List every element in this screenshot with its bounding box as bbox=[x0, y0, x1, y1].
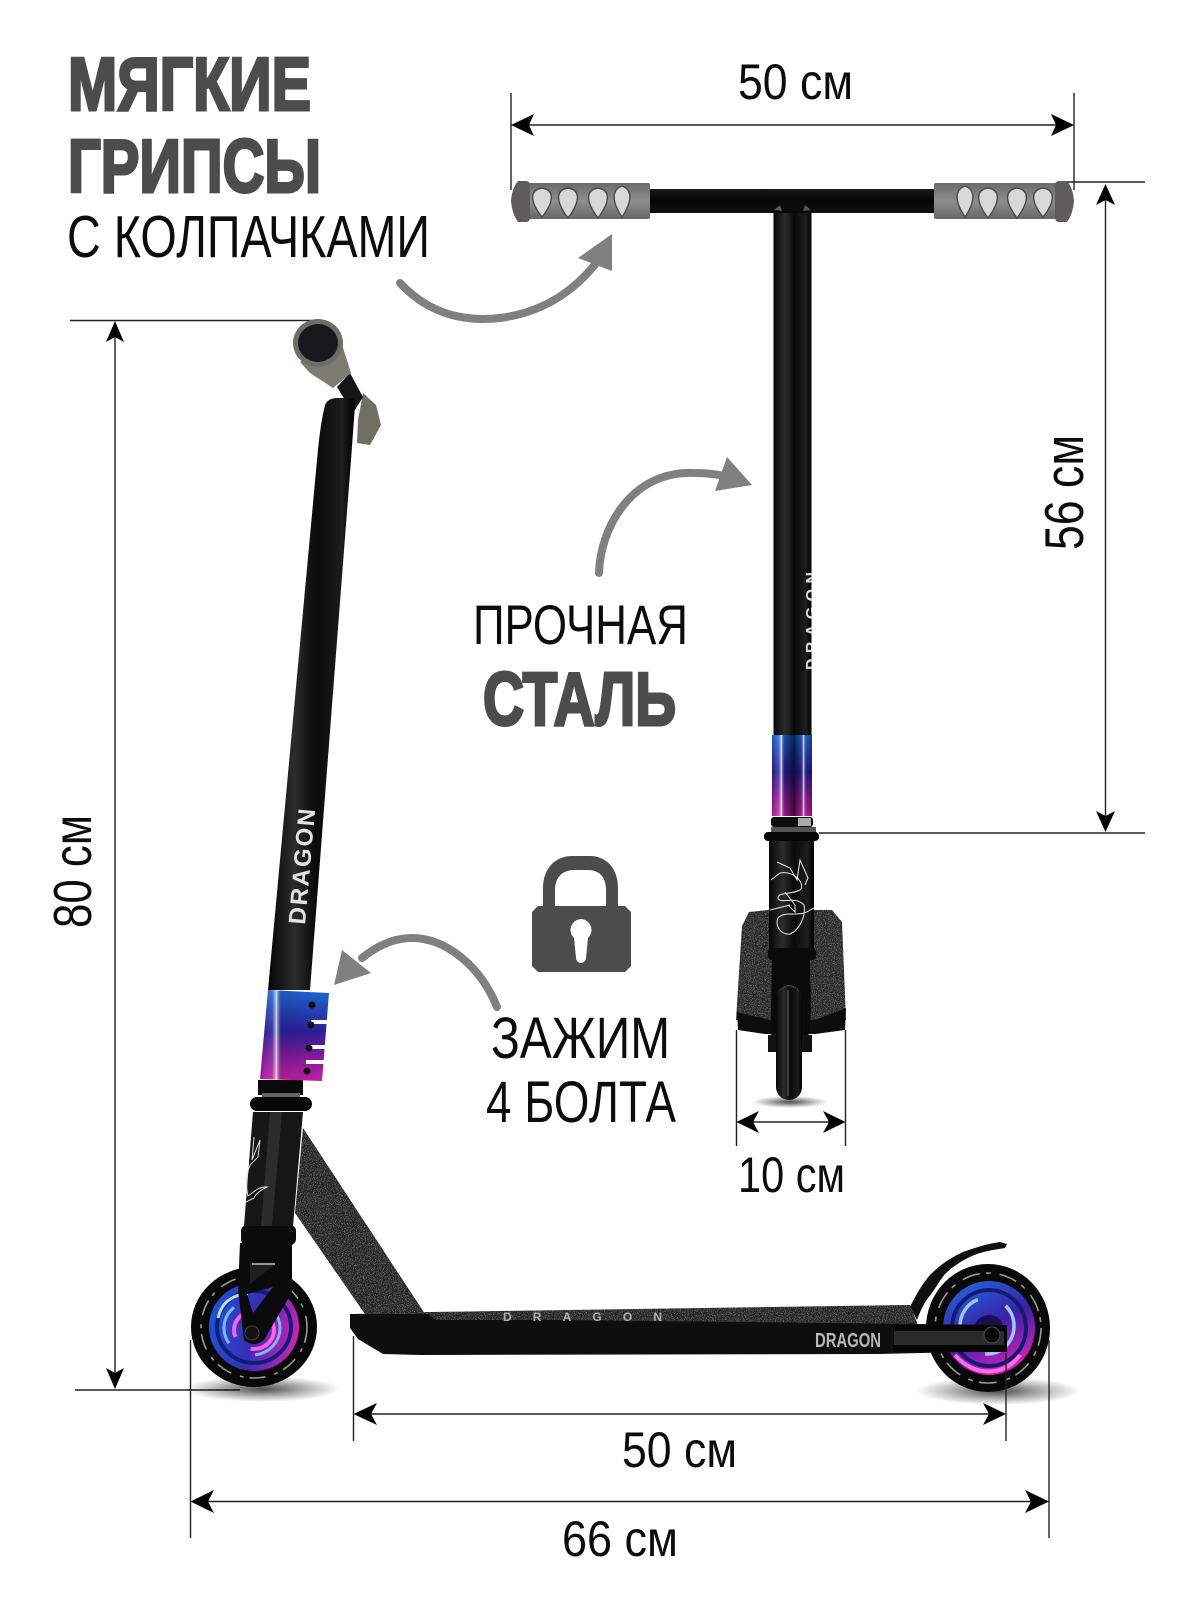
dimension: handlebar width 50 cm: 50 см bbox=[738, 54, 853, 110]
dimension: bar height 56 cm: 56 см bbox=[1033, 435, 1095, 550]
label: clamp with 4 bolts bbox=[486, 1006, 676, 1135]
fork side bbox=[238, 1243, 292, 1344]
front wheel side bbox=[191, 1267, 317, 1387]
front wheel bbox=[776, 987, 802, 1100]
right grip bbox=[934, 181, 1074, 222]
fork bbox=[771, 958, 811, 1040]
dimension: total height 80 cm bbox=[43, 320, 323, 1390]
bar handle side grips bbox=[293, 319, 381, 445]
title: soft grips with caps bbox=[67, 42, 430, 270]
dimension: total length 66 cm bbox=[190, 1340, 1049, 1567]
label line 1: ЗАЖИМ bbox=[491, 1006, 670, 1071]
arrow: to grips bbox=[400, 234, 612, 319]
clamp bbox=[260, 990, 329, 1081]
deck bbox=[350, 1305, 1007, 1355]
ground shadows bbox=[184, 1376, 1080, 1405]
T junction bbox=[773, 200, 812, 213]
icon: padlock bbox=[532, 856, 631, 972]
dimension: handlebar width 50 cm bbox=[511, 54, 1074, 190]
ground shadow bbox=[752, 1096, 828, 1108]
side view scooter bbox=[184, 319, 1080, 1405]
stem brand text: DRAGON bbox=[804, 572, 821, 670]
axle bolts bbox=[768, 1035, 812, 1052]
bar brand text: DRAGON bbox=[284, 808, 321, 926]
title line 1: МЯГКИЕ bbox=[68, 42, 311, 126]
front view scooter bbox=[511, 181, 1074, 1108]
dragon logo side bbox=[246, 1137, 267, 1202]
deck side brand text: DRAGON bbox=[815, 1330, 881, 1352]
dimension: bar height 56 cm bbox=[819, 182, 1145, 833]
lower headset side bbox=[241, 1225, 296, 1245]
dimension: total length 66 cm: 66 см bbox=[562, 1511, 678, 1567]
dimension: deck width 10 cm: 10 см bbox=[738, 1147, 845, 1203]
arrow: to steel bar bbox=[599, 457, 752, 573]
dragon logo bbox=[770, 860, 814, 934]
dimension: total height 80 cm: 80 см bbox=[43, 815, 103, 928]
crossbar bbox=[650, 189, 934, 213]
dimension: deck length 50 cm: 50 см bbox=[622, 1422, 737, 1478]
dimension: deck width 10 cm bbox=[736, 1030, 846, 1203]
upper headset side bbox=[250, 1080, 312, 1111]
title line 2: ГРИПСЫ bbox=[68, 124, 321, 208]
rear wheel side bbox=[926, 1264, 1050, 1392]
top headset bbox=[764, 817, 819, 841]
head tube bbox=[769, 840, 814, 950]
title line 3: С КОЛПАЧКАМИ bbox=[67, 204, 430, 270]
dimension: deck length 50 cm bbox=[354, 1336, 1006, 1478]
deck front bbox=[736, 910, 846, 1034]
label: durable steel bbox=[473, 593, 688, 741]
axle bbox=[245, 1326, 259, 1340]
chrome tube bbox=[772, 735, 812, 816]
T bar stem bbox=[774, 213, 812, 735]
label line 2: 4 БОЛТА bbox=[486, 1070, 676, 1135]
deck top brand text: DRAGON bbox=[503, 1310, 662, 1324]
head tube side bbox=[244, 1112, 303, 1226]
left grip bbox=[511, 181, 650, 222]
deck brace bbox=[295, 1128, 427, 1317]
arrow: to clamp bbox=[334, 938, 497, 1007]
label line 1: ПРОЧНАЯ bbox=[473, 593, 688, 656]
rear dropout bbox=[893, 1325, 1007, 1352]
rear fender bbox=[910, 1242, 1007, 1320]
lower headset bbox=[768, 948, 816, 960]
bar tube side bbox=[268, 398, 355, 990]
label line 2: СТАЛЬ bbox=[483, 657, 676, 741]
